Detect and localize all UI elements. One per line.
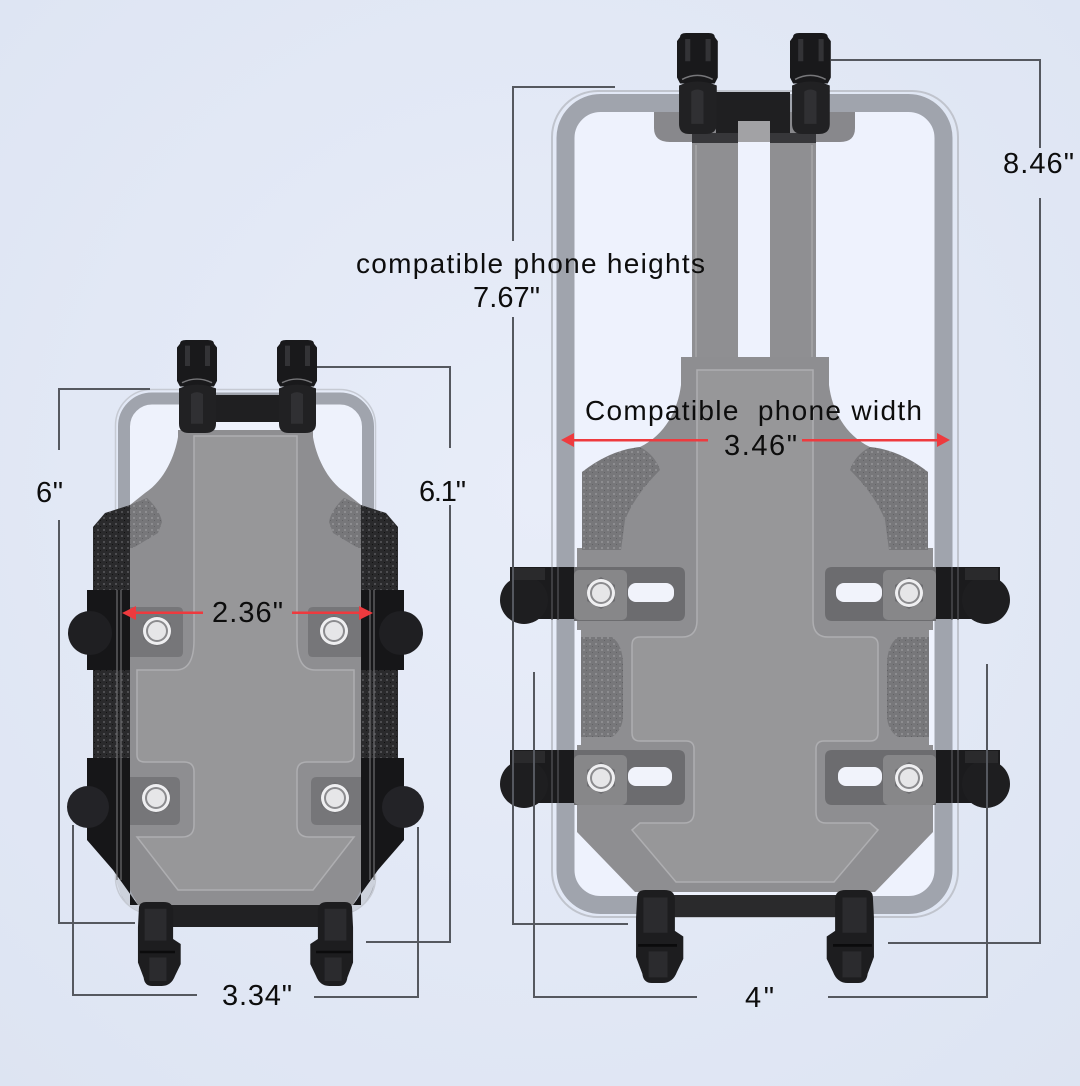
phone outer edge: small xyxy=(116,390,376,914)
label: 2.36: 2.36" xyxy=(212,597,283,629)
top clamp: large right xyxy=(790,33,831,134)
bottom bar: small xyxy=(170,905,322,927)
holder body: small left half xyxy=(67,430,246,905)
top clamp: large left xyxy=(677,33,718,134)
dimension 8.46 inch xyxy=(831,60,1040,943)
dimension 4 inch xyxy=(534,664,987,997)
phone corners: small bottom xyxy=(119,865,372,911)
top clamp: small right xyxy=(277,340,317,433)
dimension lines xyxy=(59,60,1040,997)
holder body: large left half xyxy=(500,357,755,892)
holder body: large right half xyxy=(755,357,1010,892)
labels xyxy=(36,148,1074,1014)
bottom clamp: large right xyxy=(827,890,874,983)
bottom bar: large xyxy=(671,895,838,917)
extension arm: left xyxy=(692,142,738,360)
bridge tab: large xyxy=(738,121,770,142)
label: compatible phone width: Compatible phone width xyxy=(585,395,922,426)
label: 8.46: 8.46" xyxy=(1003,148,1074,180)
phone outline: small xyxy=(124,398,368,908)
phone outline: large xyxy=(566,103,944,905)
extension arm: right xyxy=(770,142,816,360)
label: 4: 4" xyxy=(745,982,774,1014)
dimension 3.34 inch xyxy=(73,825,418,997)
label: 7.67: 7.67" xyxy=(473,282,540,314)
arm tops: large xyxy=(692,133,816,143)
label: 3.46: 3.46" xyxy=(724,430,797,462)
dimension 6.1 inch xyxy=(317,367,450,942)
phone outer edge: large xyxy=(552,91,958,917)
dimension 7.67 inch xyxy=(513,87,628,924)
arrows: large width 3.46 xyxy=(561,433,950,447)
bottom clamp: large left xyxy=(636,890,683,983)
holder body: small right half xyxy=(246,430,424,905)
top clamp: small left xyxy=(177,340,217,433)
top bridge: large xyxy=(716,92,790,133)
panel: small phone holder xyxy=(67,340,424,986)
label: 6: 6" xyxy=(36,477,63,509)
label: 6.1: 6.1" xyxy=(419,476,466,508)
label: compatible phone heights: compatible phone heights xyxy=(356,248,705,279)
bottom clamp: small right xyxy=(310,902,353,986)
bottom clamp: small left xyxy=(138,902,181,986)
dimension 6 inch xyxy=(59,389,150,923)
panel: large phone holder xyxy=(500,33,1010,983)
arm edge lines xyxy=(696,145,812,358)
top notch: large xyxy=(654,112,855,142)
arrows: small width 2.36 xyxy=(122,606,373,620)
label: 3.34: 3.34" xyxy=(222,980,292,1012)
top bridge: small xyxy=(213,395,282,422)
